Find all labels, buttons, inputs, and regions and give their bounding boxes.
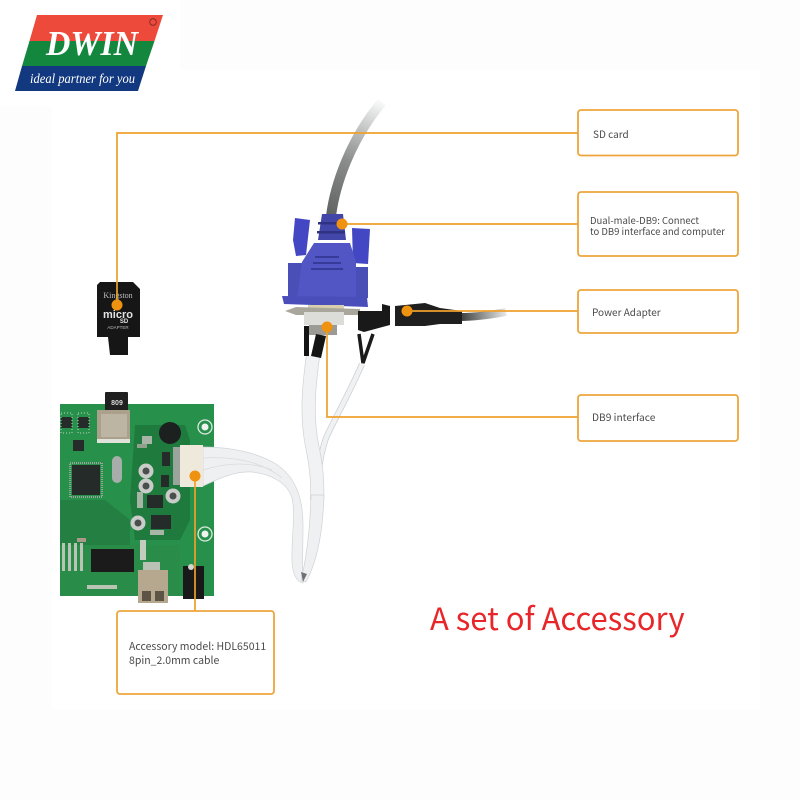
black power adapter plug and cable [358, 303, 506, 363]
callout: Power Adapter: Power Adapter [592, 304, 661, 319]
callout: Dual-male-DB9: to DB9 interface and computer [590, 224, 725, 238]
logo: DWIN [15, 15, 163, 91]
caption: A set of Accessory: A set of Accessory [430, 594, 685, 639]
header [91, 549, 134, 572]
grey VGA cable [331, 102, 382, 216]
callout: Dual-male-DB9: Dual-male-DB9: Connect [590, 213, 699, 227]
ICs [147, 495, 163, 508]
microSD slot [97, 392, 130, 443]
callout: SD card [578, 110, 738, 156]
callout: accessory model: 8pin_2.0mm cable [129, 653, 219, 668]
leader line: Power Adapter [402, 306, 578, 316]
callout: Power Adapter [578, 290, 738, 333]
blue VGA DB9 connector [282, 214, 370, 307]
leader line: DB9 interface [322, 322, 578, 417]
leader line: SD card [112, 133, 578, 310]
capacitors [130, 464, 180, 530]
icon: microSD card with adapter [97, 282, 140, 355]
microSD slot: 809 [111, 400, 123, 407]
buzzer [159, 422, 181, 444]
callout: DB9 interface [578, 395, 738, 441]
logo: DWIN: ideal partner for you [30, 72, 135, 87]
pads [62, 538, 146, 589]
crystal [112, 456, 122, 483]
ribbon cable [203, 356, 362, 583]
photo: green circuit board [60, 392, 214, 603]
leader line: Dual-male-DB9 [336, 218, 578, 230]
USB port [138, 562, 168, 603]
callout: SD card: SD card [593, 126, 629, 141]
callout: Dual-male-DB9 [578, 192, 738, 256]
logo: DWIN: DWIN [45, 24, 140, 63]
mount holes [198, 420, 212, 434]
callout: accessory model [117, 611, 274, 694]
icon: microSD card with adapter: micro [103, 309, 133, 321]
white 8-pin connector [173, 445, 203, 487]
icon: microSD card with adapter: Kingston [103, 291, 133, 300]
callout: accessory model: Accessory model: HDL65011 [129, 639, 266, 654]
main chip [70, 463, 102, 497]
power jack [183, 564, 204, 599]
callout: DB9 interface: DB9 interface [592, 409, 656, 424]
small chips [61, 413, 89, 451]
metal D-sub shell with wires [285, 305, 360, 358]
leader line: accessory cable [190, 470, 200, 611]
icon: microSD card with adapter: ADAPTER [107, 325, 129, 330]
icon: microSD card with adapter: SD [120, 319, 129, 325]
